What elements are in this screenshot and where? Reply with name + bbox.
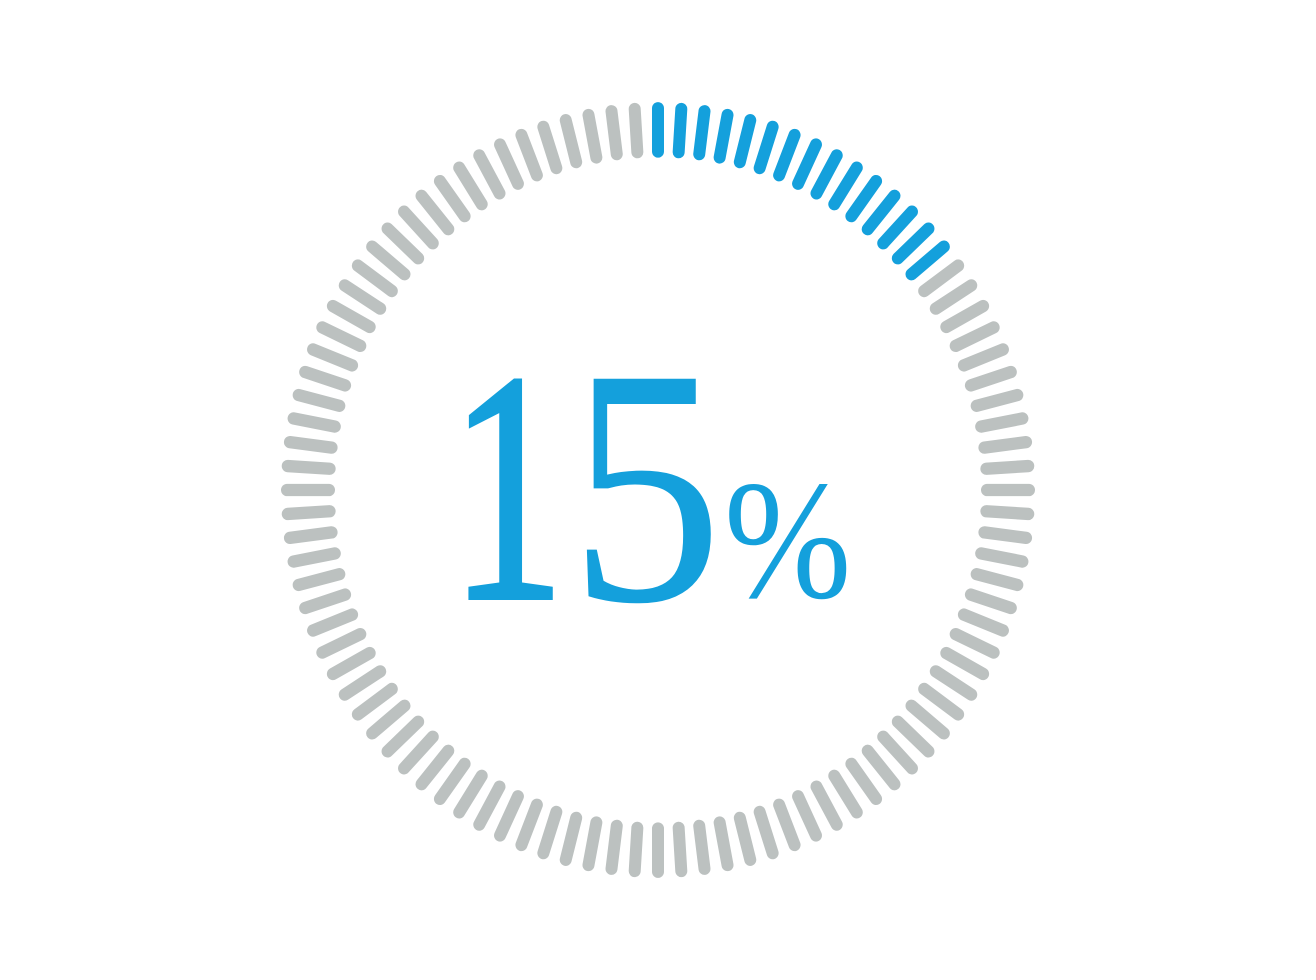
percent sign: % (724, 446, 851, 634)
percentage value: 15% (450, 299, 851, 673)
remaining gray ticks: 85 percent (269, 89, 1047, 891)
filled blue ticks: 15 percent (652, 102, 960, 291)
radial ticks: complete gauge ring (269, 89, 1047, 891)
digit: 5: 5 (569, 299, 723, 673)
digit: 1: 1 (450, 307, 565, 669)
